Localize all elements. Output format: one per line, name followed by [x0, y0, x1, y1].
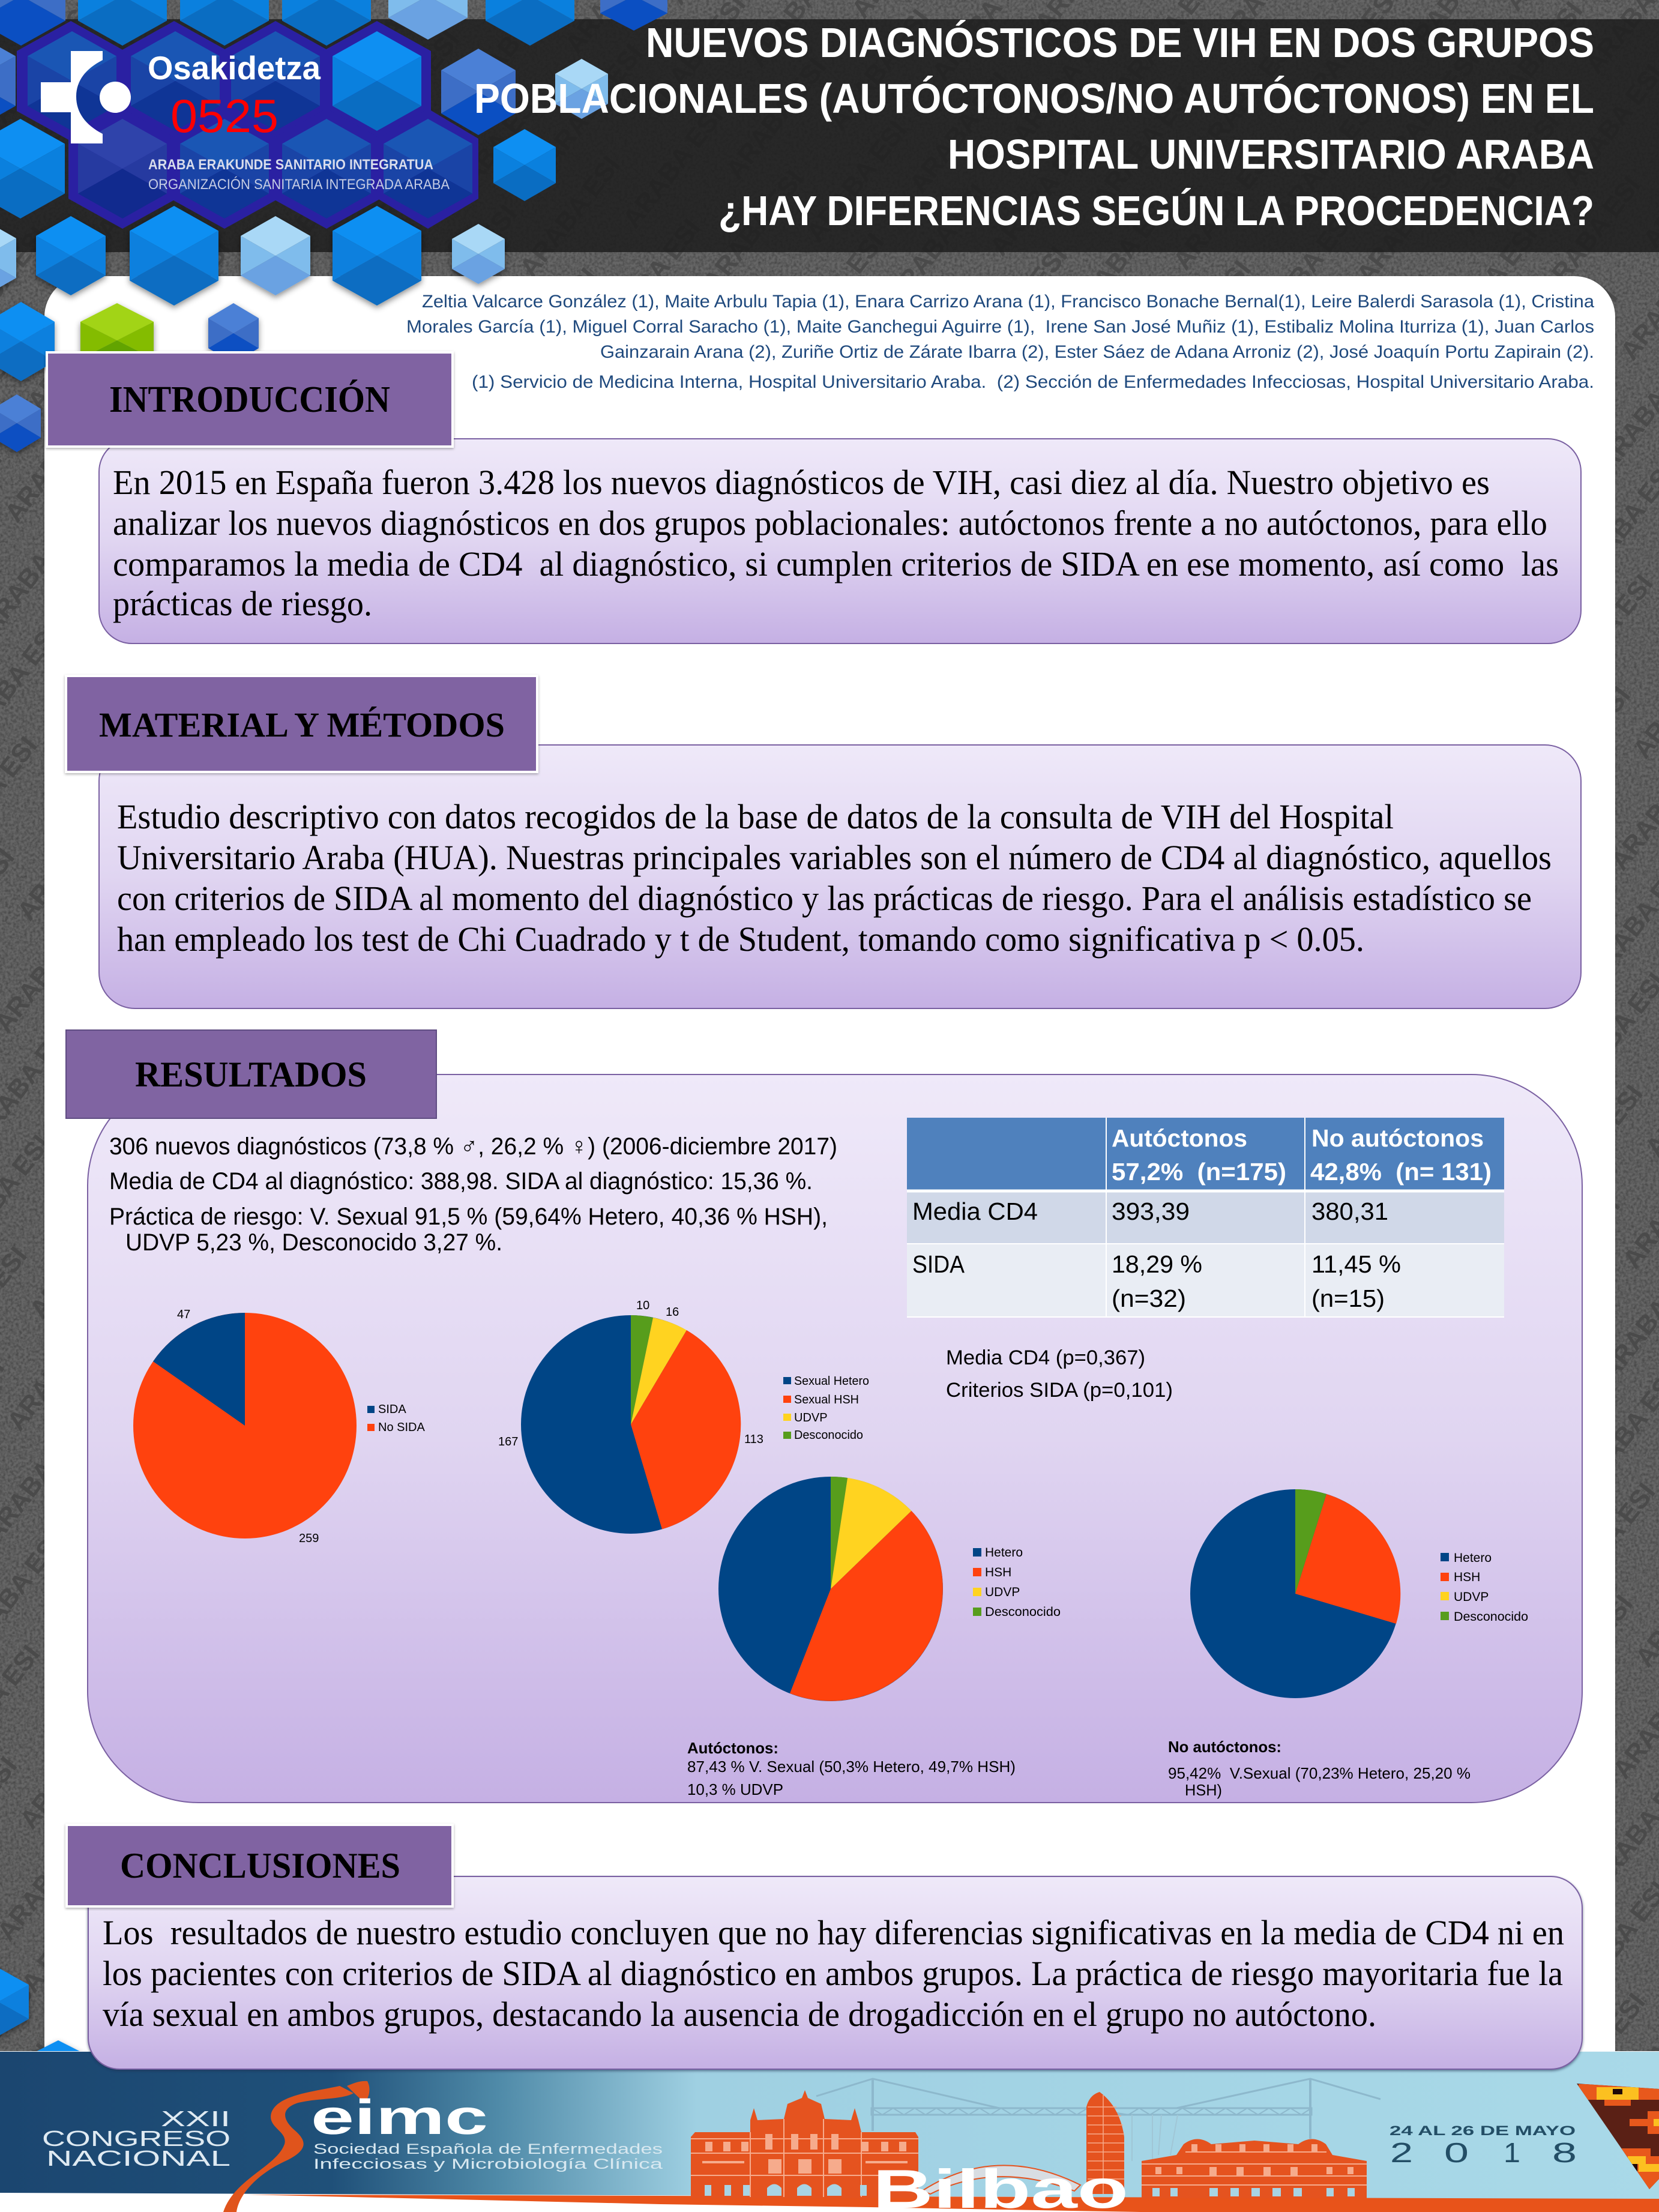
building: ayuntamiento — [691, 2090, 918, 2198]
society name: Infecciosas y Microbiología Clínica — [313, 2156, 663, 2172]
heading: introducción: INTRODUCCIÓN — [109, 379, 390, 420]
event year: 1 — [1504, 2137, 1520, 2168]
caption: autóctonos — [687, 1739, 1016, 1798]
caption: autóctonos: 87,43 % V. Sexual (50,3% Hetero, 49,7% HSH) — [687, 1758, 1016, 1776]
caption: no autóctonos: 95,42% V.Sexual (70,23% Hetero, 25,20 % — [1168, 1764, 1471, 1782]
pie chart: autóctonos: Desconocido — [985, 1605, 1061, 1619]
text block: summary — [109, 1133, 837, 1256]
text block: introducción: En 2015 en España fueron 3.428 los nuevos diagnósticos de VIH, casi diez al día. Nuestro objetivo es — [113, 463, 1490, 502]
icon: emblem dot — [100, 82, 131, 113]
pie chart: autóctonos: UDVP — [985, 1585, 1020, 1599]
bottom orange stripe — [248, 2195, 1659, 2212]
pie chart: no autóctonos: UDVP — [1454, 1590, 1489, 1604]
text block: material y métodos: Universitario Araba (HUA). Nuestras principales variables son el número de CD4 al diagnóstico, aquellos — [117, 838, 1552, 877]
authors and affiliations: (1) Servicio de Medicina Interna, Hospital Universitario Araba. (2) Sección de Enfermedades Infecciosas, Hospital Universitario Araba. — [472, 372, 1594, 392]
panel: material y métodos — [66, 676, 1581, 1008]
eimc logo: eimc — [311, 2090, 488, 2145]
title: POBLACIONALES (AUTÓCTONOS/NO AUTÓCTONOS) EN EL — [474, 75, 1594, 122]
pie chart: práctica de riesgo: Sexual HSH — [794, 1393, 859, 1406]
table: comparison of groups: No autóctonos — [1311, 1124, 1484, 1152]
abstract number: 0525 — [170, 89, 279, 142]
text block: summary: Media de CD4 al diagnóstico: 388,98. SIDA al diagnóstico: 15,36 %. — [109, 1168, 813, 1195]
event year — [1390, 2137, 1577, 2168]
text block: conclusiones: Los resultados de nuestro estudio concluyen que no hay diferencias significativas en la media de CD4 ni en — [103, 1913, 1564, 1952]
congress title: CONGRESO — [42, 2126, 230, 2151]
caption: no autóctonos — [1168, 1738, 1471, 1799]
text block: material y métodos: Estudio descriptivo con datos recogidos de la base de datos de la consulta de VIH del Hospital — [117, 797, 1394, 836]
text block: introducción: analizar los nuevos diagnósticos en dos grupos poblacionales: autóctonos frente a no autóctonos, para ello — [113, 504, 1547, 543]
heading: resultados — [66, 1030, 436, 1118]
pie chart: no autóctonos: Hetero — [1454, 1551, 1492, 1565]
table: comparison of groups: (n=32) — [1112, 1285, 1186, 1312]
heading: introducción — [47, 352, 453, 447]
table: comparison of groups: SIDA — [912, 1250, 965, 1278]
pie chart: práctica de riesgo: 10 — [636, 1299, 649, 1312]
title: HOSPITAL UNIVERSITARIO ARABA — [948, 131, 1594, 178]
mosaic triangle — [1573, 2080, 1659, 2194]
pie chart: práctica de riesgo — [498, 1299, 869, 1534]
text block: introducción: comparamos la media de CD4 al diagnóstico, si cumplen criterios de SIDA en ese momento, así como las — [113, 544, 1559, 583]
pie chart: práctica de riesgo: UDVP — [794, 1411, 828, 1424]
pie chart: SIDA: No SIDA — [378, 1421, 425, 1434]
title: NUEVOS DIAGNÓSTICOS DE VIH EN DOS GRUPOS — [646, 19, 1594, 66]
pie chart: no autóctonos — [1190, 1489, 1528, 1698]
text block: material y métodos: han empleado los test de Chi Cuadrado y t de Student, tomando como significativa p < 0.05. — [117, 920, 1364, 959]
p values: Media CD4 (p=0,367) — [946, 1346, 1145, 1369]
table: comparison of groups: 57,2% (n=175) — [1112, 1158, 1286, 1186]
text block: material y métodos: con criterios de SIDA al momento del diagnóstico y las prácticas de riesgo. Para el análisis estadístico se — [117, 879, 1532, 918]
pie chart: autóctonos — [718, 1477, 1061, 1701]
text block: material y métodos — [117, 797, 1552, 959]
society name: Sociedad Española de Enfermedades — [313, 2141, 663, 2157]
event year: 2 — [1390, 2137, 1413, 2168]
heading: conclusiones — [67, 1825, 453, 1906]
text block: conclusiones: los pacientes con criterios de SIDA al diagnóstico en ambos grupos. La práctica de riesgo mayoritaria fue la — [103, 1954, 1563, 1993]
authors and affiliations: Morales García (1), Miguel Corral Saracho (1), Maite Ganchegui Aguirre (1), Irene San José Muñiz (1), Estibaliz Molina Iturriza (1), Juan Carlos — [406, 317, 1594, 337]
panel: introducción — [47, 352, 1581, 643]
footer banner: congress — [0, 2051, 1659, 2212]
p values: Criterios SIDA (p=0,101) — [946, 1379, 1173, 1402]
table: comparison of groups: 11,45 % — [1311, 1250, 1401, 1278]
pie chart: práctica de riesgo: 167 — [498, 1435, 518, 1448]
authors and affiliations — [406, 292, 1594, 392]
authors and affiliations: Gainzarain Arana (2), Zuriñe Ortiz de Zárate Ibarra (2), Ester Sáez de Adana Arroniz (2), José Joaquín Portu Zapirain (2). — [600, 342, 1594, 362]
pie chart: no autóctonos: HSH — [1454, 1570, 1480, 1584]
arch behind wordmark — [922, 2165, 1080, 2194]
event year: 0 — [1444, 2137, 1469, 2168]
pie chart: práctica de riesgo: 16 — [666, 1306, 679, 1319]
panel: conclusiones — [67, 1825, 1582, 2069]
event date: 24 AL 26 DE MAYO — [1390, 2123, 1576, 2138]
heading: material y métodos: MATERIAL Y MÉTODOS — [99, 705, 505, 744]
bottom white band — [0, 2193, 1139, 2212]
white content sheet — [44, 276, 1615, 2137]
pie chart: SIDA: 259 — [299, 1532, 319, 1545]
icon: cross emblem — [41, 51, 103, 143]
text block: introducción — [113, 463, 1559, 623]
table: comparison of groups — [907, 1118, 1504, 1317]
bridge — [816, 2079, 1380, 2161]
text block: summary: 306 nuevos diagnósticos (73,8 % ♂, 26,2 % ♀) (2006-diciembre 2017) — [109, 1133, 837, 1160]
pie chart: SIDA: SIDA — [378, 1403, 406, 1416]
pie chart: práctica de riesgo: 113 — [744, 1433, 763, 1446]
p values — [946, 1346, 1173, 1402]
authors and affiliations: Zeltia Valcarce González (1), Maite Arbulu Tapia (1), Enara Carrizo Arana (1), Francisco Bonache Bernal(1), Leire Balerdi Sarasola (1), Cristina — [422, 292, 1594, 312]
organisation name: ARABA ERAKUNDE SANITARIO INTEGRATUA — [148, 157, 433, 173]
text block: summary: UDVP 5,23 %, Desconocido 3,27 %. — [125, 1229, 502, 1256]
table: comparison of groups: (n=15) — [1311, 1285, 1385, 1312]
pie chart: SIDA: 47 — [177, 1308, 190, 1321]
caption: autóctonos: Autóctonos: — [687, 1739, 778, 1757]
table: comparison of groups: 393,39 — [1112, 1198, 1190, 1225]
logo name: Osakidetza — [148, 49, 321, 86]
title band — [0, 19, 1659, 252]
pie chart: no autóctonos: Desconocido — [1454, 1610, 1528, 1624]
table: comparison of groups: 18,29 % — [1112, 1250, 1202, 1278]
table: comparison of groups: 380,31 — [1311, 1198, 1388, 1225]
pie chart: autóctonos: HSH — [985, 1566, 1011, 1579]
pie chart: autóctonos: Hetero — [985, 1546, 1023, 1560]
text block: introducción: prácticas de riesgo. — [113, 584, 372, 623]
table: comparison of groups: 42,8% (n= 131) — [1310, 1158, 1492, 1186]
table: comparison of groups: Autóctonos — [1112, 1124, 1247, 1152]
organisation name spanish: ORGANIZACIÓN SANITARIA INTEGRADA ARABA — [148, 176, 450, 193]
heading: conclusiones: CONCLUSIONES — [120, 1846, 400, 1885]
caption: no autóctonos: No autóctonos: — [1168, 1738, 1281, 1756]
text block: conclusiones — [103, 1913, 1564, 2034]
heading: material y métodos — [66, 676, 537, 772]
congress title: XXII — [161, 2106, 230, 2131]
caption: autóctonos: 10,3 % UDVP — [687, 1780, 783, 1798]
building: theatre — [1142, 2139, 1367, 2198]
caption: no autóctonos: HSH) — [1185, 1781, 1222, 1799]
text block: conclusiones: vía sexual en ambos grupos, destacando la ausencia de drogadicción en el grupo no autóctono. — [103, 1995, 1376, 2034]
congress title: NACIONAL — [46, 2146, 230, 2171]
swoosh — [223, 2081, 369, 2212]
panel: resultados — [66, 1030, 1582, 1803]
congress title — [43, 2111, 229, 2166]
hexagon decoration and logo backdrop — [0, 0, 667, 2114]
logo: Osakidetza — [41, 49, 450, 193]
pie chart: práctica de riesgo: Desconocido — [794, 1429, 863, 1442]
table: comparison of groups: Media CD4 — [912, 1198, 1038, 1225]
text block: summary: Práctica de riesgo: V. Sexual 91,5 % (59,64% Hetero, 40,36 % HSH), — [109, 1204, 828, 1230]
event year: 8 — [1552, 2137, 1577, 2168]
heading: resultados: RESULTADOS — [135, 1055, 367, 1094]
pie chart: SIDA — [133, 1308, 425, 1545]
building: tower — [1086, 2092, 1124, 2194]
title — [474, 19, 1594, 234]
pie chart: práctica de riesgo: Sexual Hetero — [794, 1375, 869, 1388]
society name — [313, 2141, 663, 2172]
